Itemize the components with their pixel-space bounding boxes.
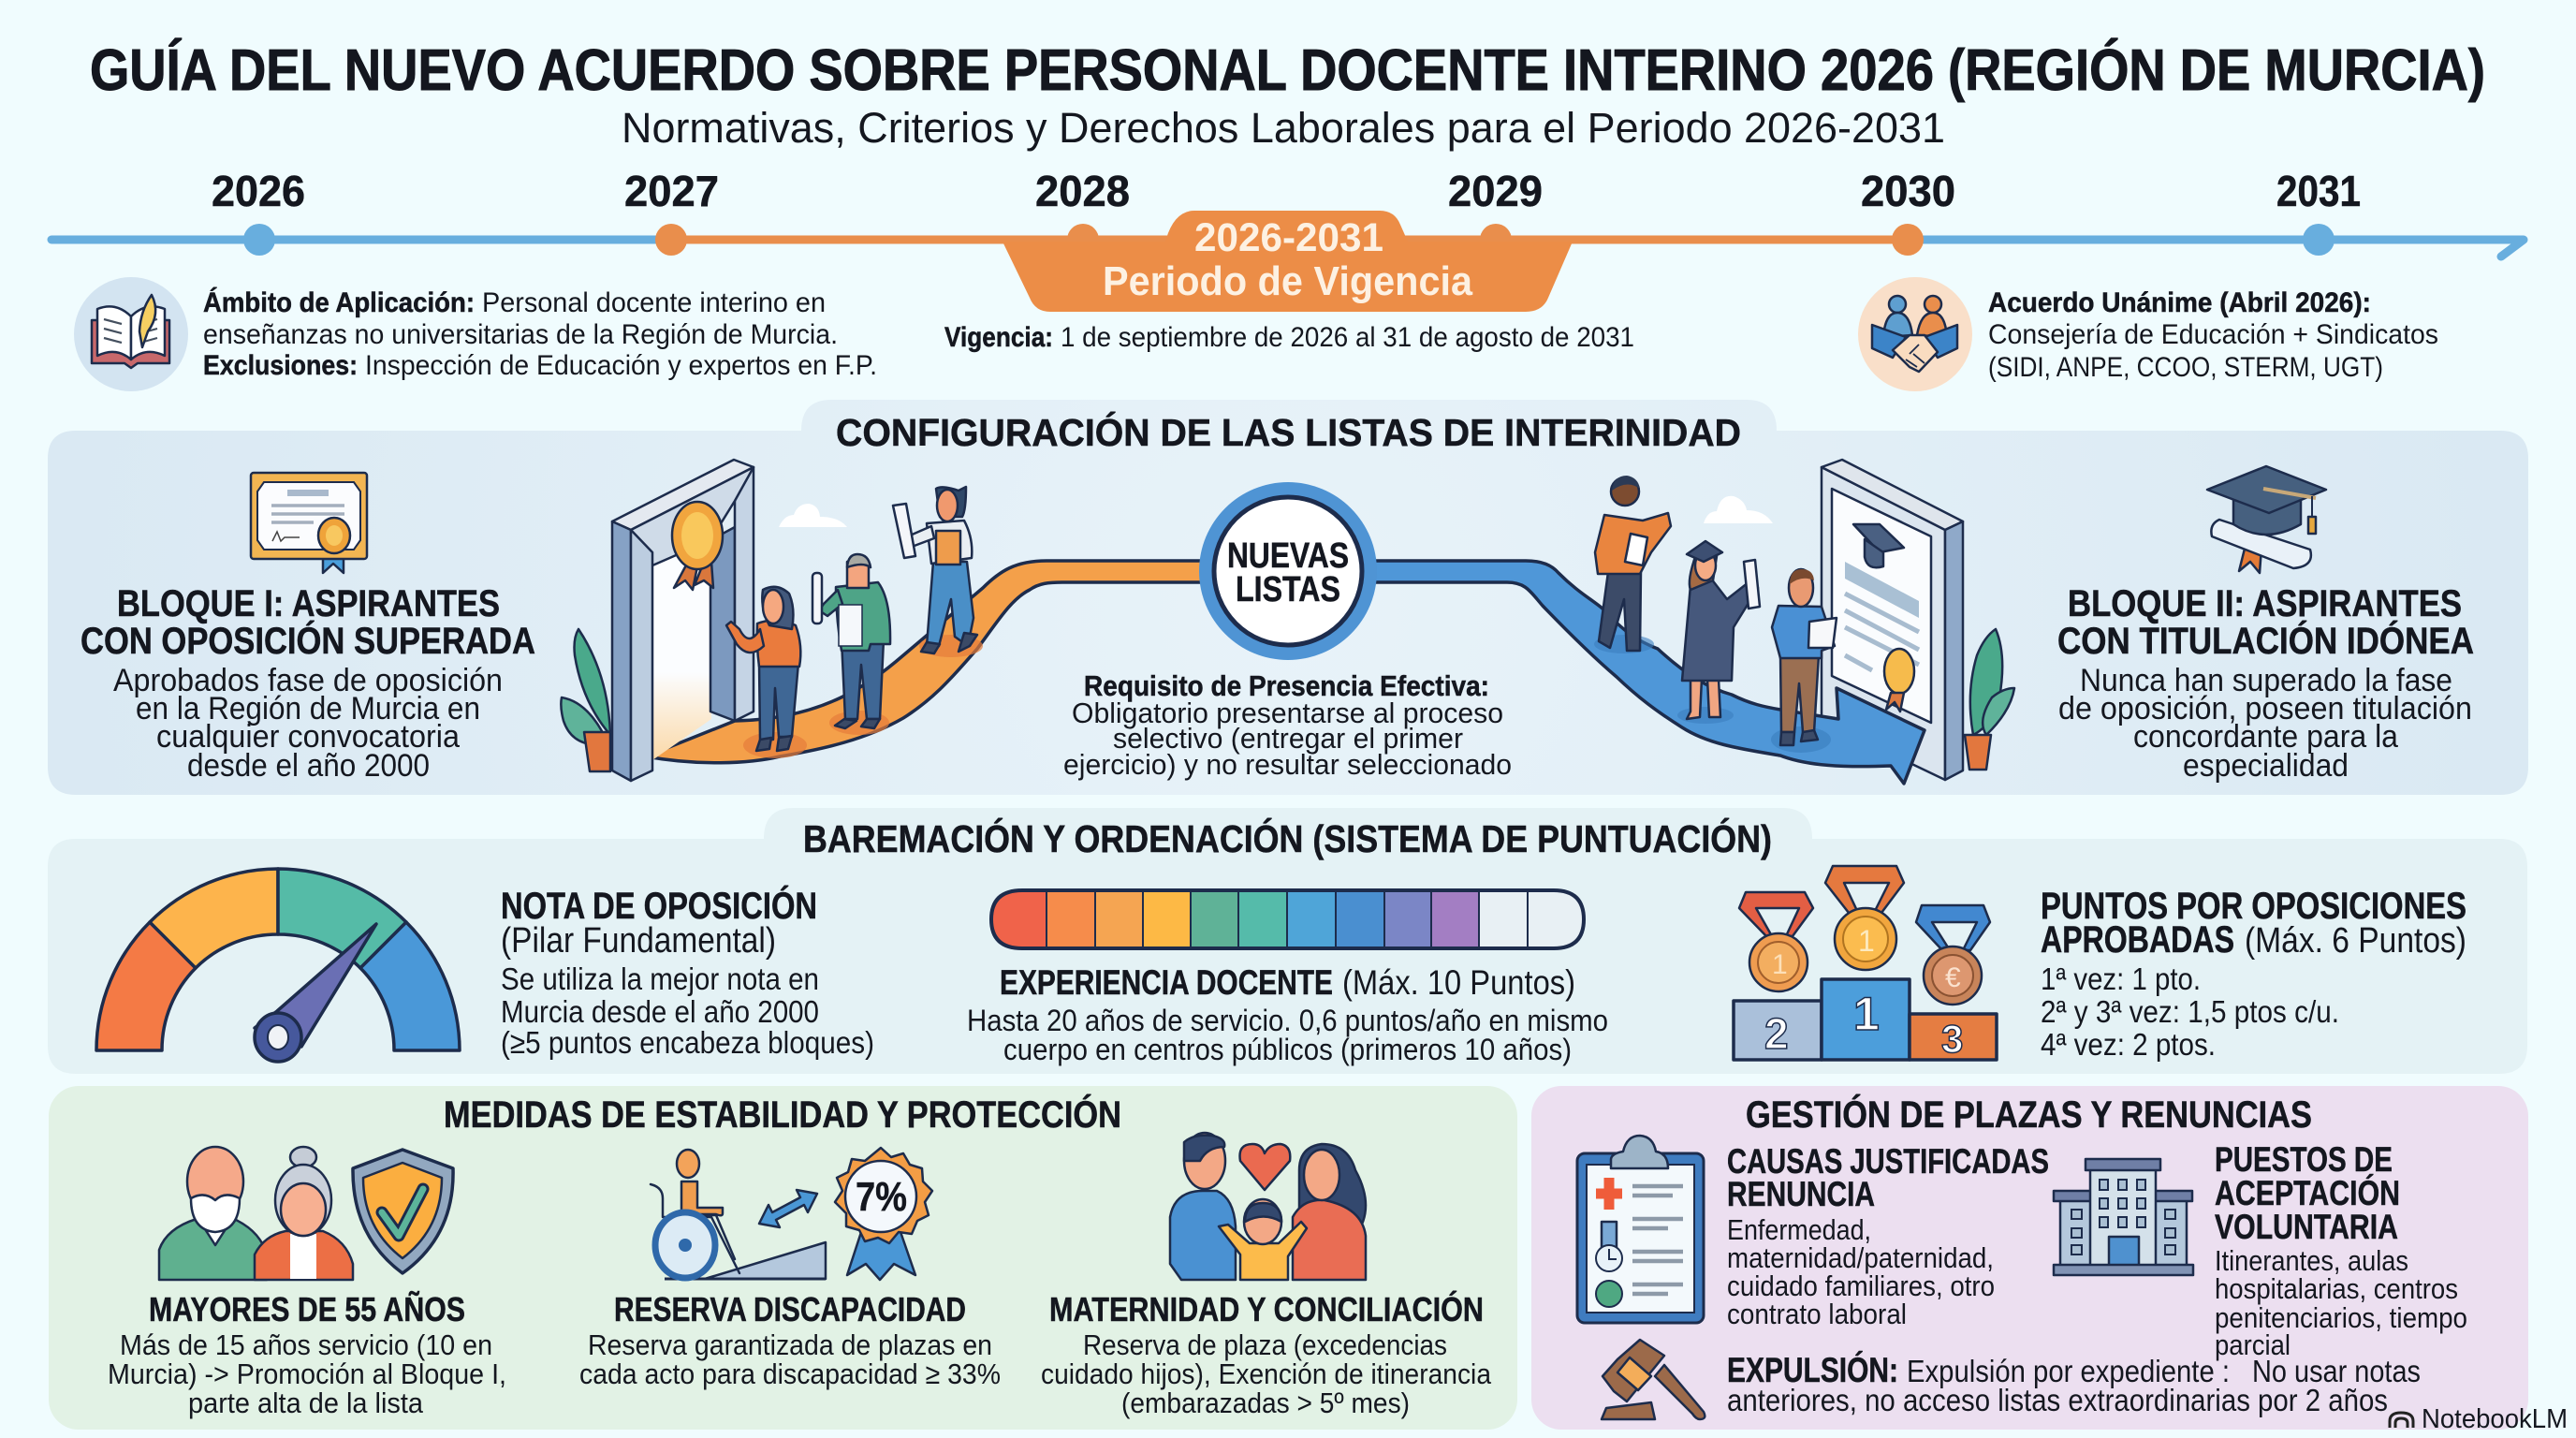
- medal right: [1916, 905, 1990, 1005]
- expulsión text: Expulsión por expediente :: [1907, 1354, 2230, 1388]
- bloque II text: BLOQUE II: ASPIRANTES: [2068, 583, 2462, 624]
- icon: document panel: [1822, 460, 1963, 780]
- period banner: 2026-2031: [1194, 215, 1383, 260]
- experiencia docente text: EXPERIENCIA DOCENTE: [1000, 963, 1333, 1002]
- puestos de aceptación text: PUESTOS DE: [2215, 1140, 2393, 1179]
- experiencia docente text: [967, 963, 1608, 1066]
- nuevas listas circle: LISTAS: [1236, 570, 1340, 609]
- medal left: [1739, 892, 1813, 991]
- icon: family: [1170, 1133, 1366, 1280]
- expulsión text: anteriores, no acceso listas extraordinarias por 2 años: [1727, 1383, 2388, 1417]
- maternidad text: (embarazadas > 5º mes): [1121, 1387, 1410, 1419]
- nuevas listas circle: NUEVAS: [1227, 536, 1349, 576]
- puestos de aceptación text: [2215, 1140, 2467, 1361]
- puestos de aceptación text: hospitalarias, centros: [2215, 1272, 2458, 1305]
- maternidad text: cuidado hijos), Exención de itinerancia: [1041, 1357, 1492, 1390]
- year labels: 2026: [212, 167, 305, 215]
- reserva discapacidad text: RESERVA DISCAPACIDAD: [614, 1290, 966, 1328]
- timeline: [51, 167, 2524, 257]
- panel: gestión de plazas: [1531, 1086, 2528, 1430]
- icon: clipboard: [1577, 1136, 1704, 1323]
- bloque I text: desde el año 2000: [187, 748, 430, 784]
- mayores de 55 text: [108, 1289, 506, 1419]
- icon: seniors with shield: [159, 1147, 453, 1280]
- puestos de aceptación text: Itinerantes, aulas: [2215, 1244, 2408, 1277]
- causas justificadas text: maternidad/paternidad,: [1727, 1241, 1994, 1274]
- causas justificadas text: RENUNCIA: [1727, 1175, 1875, 1213]
- requisito text: Requisito de Presencia Efectiva:: [1084, 669, 1489, 702]
- puntos por oposiciones text: APROBADAS: [2041, 919, 2234, 961]
- expulsión text: [1727, 1350, 2421, 1417]
- scope text: Ámbito de Aplicación:: [203, 286, 475, 318]
- requisito text: ejercicio) y no resultar seleccionado: [1063, 748, 1512, 781]
- causas justificadas text: CAUSAS JUSTIFICADAS: [1727, 1142, 2049, 1181]
- bloque II text: de oposición, poseen titulación: [2058, 691, 2472, 726]
- bloque II text: Nunca han superado la fase: [2080, 663, 2452, 698]
- maternidad text: MATERNIDAD Y CONCILIACIÓN: [1049, 1289, 1484, 1328]
- icon: plant right: [1965, 629, 2014, 770]
- medal left: 1: [1772, 949, 1788, 980]
- puestos de aceptación text: penitenciarios, tiempo: [2215, 1301, 2467, 1334]
- nota de oposición text: Murcia desde el año 2000: [501, 994, 819, 1029]
- nota de oposición text: [501, 884, 874, 1060]
- year labels: 2028: [1035, 167, 1130, 215]
- agreement text: (SIDI, ANPE, CCOO, STERM, UGT): [1988, 352, 2383, 383]
- period banner: [1003, 211, 1573, 312]
- experiencia docente text: cuerpo en centros públicos (primeros 10 años): [1003, 1033, 1572, 1066]
- icon: cloud right: [1704, 496, 1773, 523]
- expulsión text: EXPULSIÓN:: [1727, 1350, 1898, 1389]
- icon: cloud left: [779, 504, 847, 527]
- icon: plant left: [561, 629, 610, 771]
- panel: configuración de las listas: [48, 400, 2528, 795]
- panel heading: BAREMACIÓN Y ORDENACIÓN (SISTEMA DE PUNTUACIÓN): [803, 817, 1772, 860]
- progress bar: [991, 890, 1584, 948]
- icon: medals and podium: 2: [1764, 1009, 1789, 1058]
- bloque II text: [2057, 583, 2474, 784]
- notebooklm logo: NotebookLM: [2422, 1404, 2568, 1434]
- panel heading: MEDIDAS DE ESTABILIDAD Y PROTECCIÓN: [444, 1093, 1121, 1136]
- reserva discapacidad text: cada acto para discapacidad ≥ 33%: [579, 1357, 1001, 1390]
- year labels: 2030: [1861, 167, 1955, 215]
- icon: medals and podium: 1: [1853, 988, 1880, 1040]
- orange path: [646, 561, 1202, 763]
- reserva discapacidad text: [579, 1290, 1001, 1390]
- subtitle: Normativas, Criterios y Derechos Laborales para el Periodo 2026-2031: [622, 104, 1945, 152]
- period banner: Periodo de Vigencia: [1103, 258, 1472, 304]
- scope text: Inspección de Educación y expertos en F.P.: [365, 350, 877, 381]
- bloque II text: especialidad: [2183, 748, 2349, 784]
- year labels: 2031: [2276, 167, 2361, 215]
- year labels: 2027: [624, 167, 719, 215]
- puestos de aceptación text: ACEPTACIÓN: [2215, 1173, 2400, 1212]
- icon: graduation cap: [2207, 466, 2326, 573]
- bloque I text: cualquier convocatoria: [156, 719, 460, 755]
- figure: man green jacket: [812, 554, 890, 735]
- medal centre: [1825, 866, 1904, 970]
- bloque II text: CON TITULACIÓN IDÓNEA: [2057, 619, 2474, 662]
- figure: graduate: [1677, 541, 1760, 724]
- figure: man blue sweater: [1771, 569, 1837, 753]
- nuevas listas circle: [1199, 482, 1377, 660]
- bloque I text: en la Región de Murcia en: [136, 691, 480, 726]
- year labels: [212, 167, 2361, 215]
- figure: woman orange sweater: [726, 587, 807, 758]
- validity text: 1 de septiembre de 2026 al 31 de agosto de 2031: [1061, 322, 1634, 353]
- icon: handshake: [1858, 277, 1972, 391]
- puntos por oposiciones text: 2ª y 3ª vez: 1,5 ptos c/u.: [2041, 994, 2339, 1029]
- panel heading: GESTIÓN DE PLAZAS Y RENUNCIAS: [1746, 1093, 2312, 1136]
- experiencia docente text: Hasta 20 años de servicio. 0,6 puntos/año en mismo: [967, 1004, 1608, 1037]
- scope text: enseñanzas no universitarias de la Región de Murcia.: [203, 319, 838, 350]
- puntos por oposiciones text: PUNTOS POR OPOSICIONES: [2041, 886, 2466, 927]
- scope text: Exclusiones:: [203, 350, 358, 381]
- nota de oposición text: (Pilar Fundamental): [501, 921, 776, 961]
- maternidad text: [1041, 1289, 1492, 1419]
- nota de oposición text: NOTA DE OPOSICIÓN: [501, 884, 817, 927]
- medal centre: 1: [1858, 924, 1875, 958]
- bloque I text: BLOQUE I: ASPIRANTES: [117, 583, 500, 624]
- icon: wheelchair, arrow and badge: [651, 1148, 932, 1280]
- bloque I text: Aprobados fase de oposición: [113, 663, 503, 698]
- mayores de 55 text: parte alta de la lista: [188, 1387, 424, 1419]
- bloque I text: CON OPOSICIÓN SUPERADA: [80, 619, 535, 662]
- panel: baremación y ordenación: [48, 808, 2527, 1074]
- agreement text: [1988, 287, 2438, 383]
- puntos por oposiciones text: (Máx. 6 Puntos): [2245, 921, 2466, 961]
- agreement text: Acuerdo Unánime (Abril 2026):: [1988, 287, 2371, 318]
- mayores de 55 text: Más de 15 años servicio (10 en: [120, 1328, 492, 1361]
- reserva discapacidad text: Reserva garantizada de plazas en: [588, 1328, 992, 1361]
- figure: man orange sweater: [1594, 476, 1671, 653]
- year labels: 2029: [1448, 167, 1543, 215]
- bloque II text: concordante para la: [2133, 719, 2398, 755]
- icon: open book: [74, 277, 188, 391]
- validity text: Vigencia:: [944, 322, 1053, 353]
- icon: building: [2054, 1159, 2193, 1275]
- icon: medals and podium: [1734, 866, 1997, 1061]
- scope text: Personal docente interino en: [482, 287, 826, 318]
- puntos por oposiciones text: [2041, 886, 2466, 1062]
- icon: gavel: [1602, 1340, 1705, 1419]
- gauge: [96, 869, 460, 1062]
- agreement text: Consejería de Educación + Sindicatos: [1988, 319, 2438, 350]
- puntos por oposiciones text: 1ª vez: 1 pto.: [2041, 961, 2201, 996]
- puntos por oposiciones text: 4ª vez: 2 ptos.: [2041, 1027, 2216, 1062]
- causas justificadas text: Enfermedad,: [1727, 1213, 1871, 1246]
- panel: medidas de estabilidad: [49, 1086, 1517, 1430]
- icon: medals and podium: 3: [1941, 1017, 1963, 1061]
- nota de oposición text: (≥5 puntos encabeza bloques): [501, 1025, 874, 1060]
- requisito text: Obligatorio presentarse al proceso: [1072, 697, 1503, 729]
- puestos de aceptación text: VOLUNTARIA: [2215, 1208, 2398, 1246]
- medal right: €: [1945, 962, 1961, 993]
- causas justificadas text: contrato laboral: [1727, 1298, 1907, 1330]
- causas justificadas text: [1727, 1142, 2049, 1330]
- icon: certificate: [251, 473, 367, 573]
- causas justificadas text: cuidado familiares, otro: [1727, 1269, 1995, 1302]
- nota de oposición text: Se utiliza la mejor nota en: [501, 961, 819, 996]
- maternidad text: Reserva de plaza (excedencias: [1083, 1328, 1447, 1361]
- figure: woman white top: [893, 487, 983, 657]
- mayores de 55 text: Murcia) -> Promoción al Bloque I,: [108, 1357, 506, 1390]
- requisito text: selectivo (entregar el primer: [1113, 722, 1463, 755]
- scope text: [203, 286, 877, 381]
- puestos de aceptación text: parcial: [2215, 1328, 2291, 1361]
- expulsión text: No usar notas: [2252, 1354, 2421, 1388]
- icon: portal door: [612, 460, 754, 781]
- requisito text: [1063, 669, 1512, 781]
- experiencia docente text: (Máx. 10 Puntos): [1342, 963, 1575, 1002]
- mayores de 55 text: MAYORES DE 55 AÑOS: [149, 1289, 465, 1328]
- icon: wheelchair, arrow and badge: 7%: [856, 1174, 907, 1220]
- panel heading: CONFIGURACIÓN DE LAS LISTAS DE INTERINIDAD: [836, 411, 1741, 454]
- blue path with arrow: [1374, 561, 1925, 784]
- bloque I text: [80, 583, 535, 784]
